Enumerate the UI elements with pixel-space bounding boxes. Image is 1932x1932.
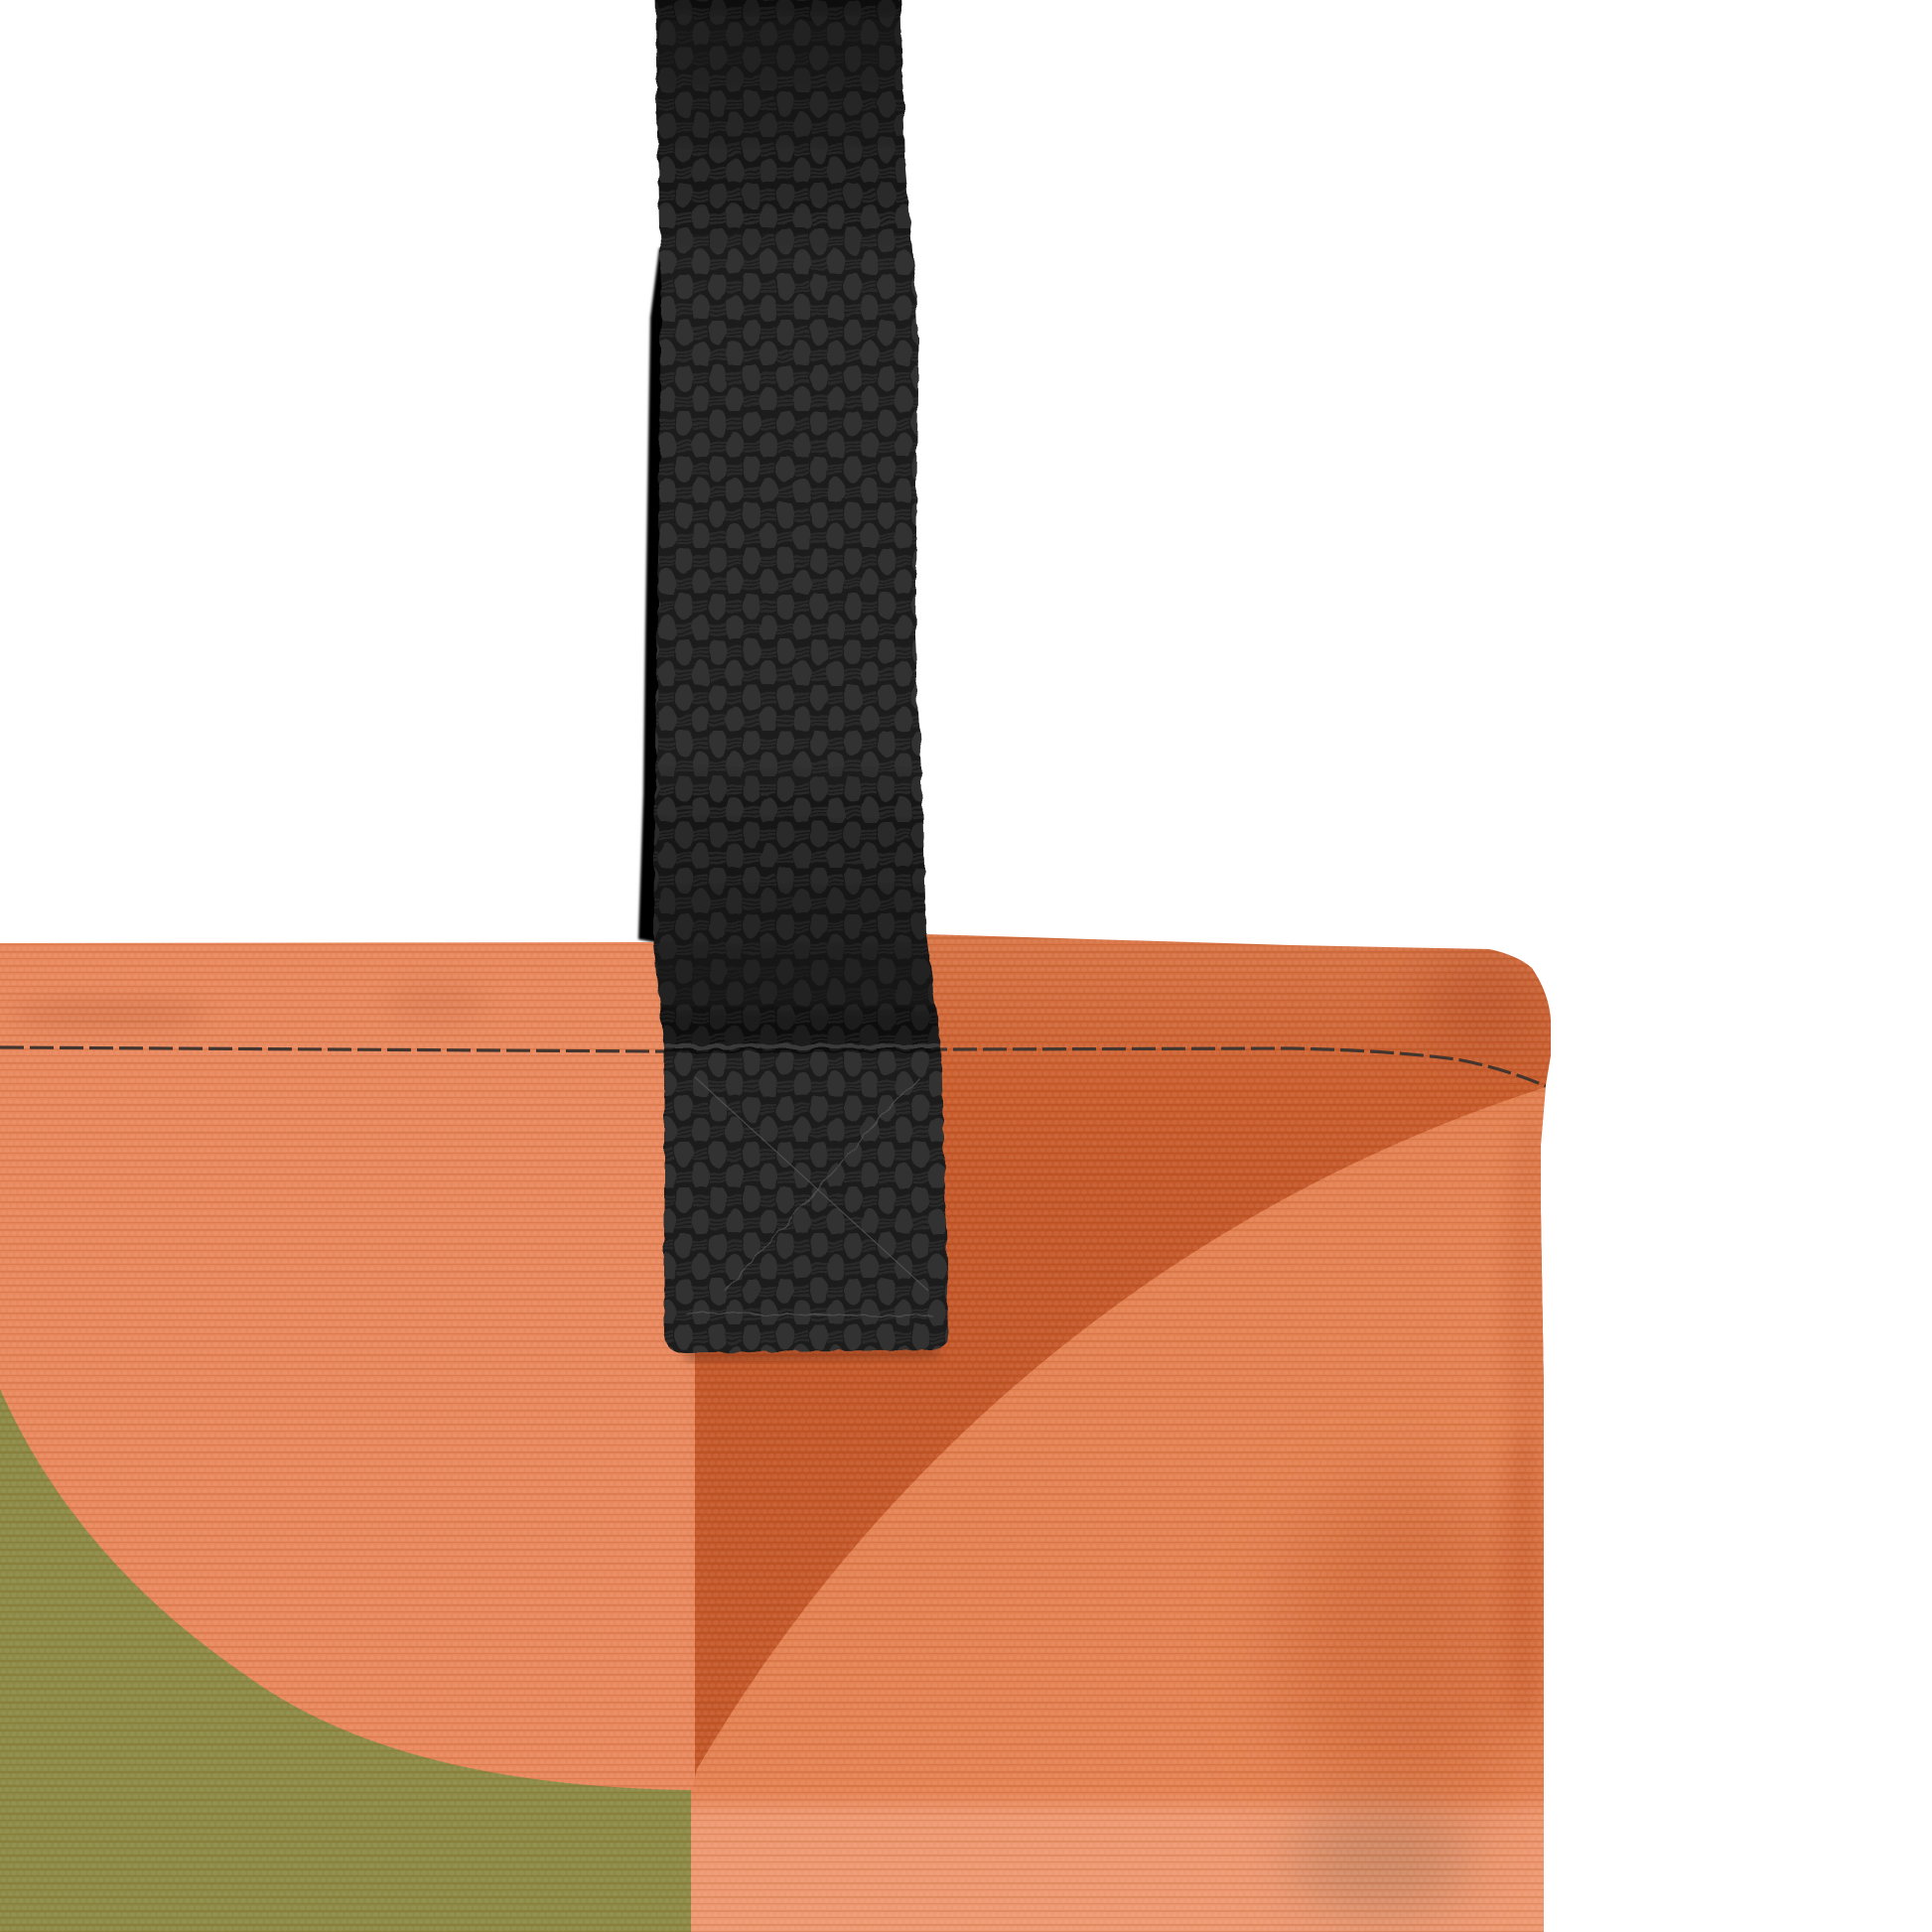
fabric shading: wrinkles near the left top edge	[35, 1001, 184, 1027]
panel: left peach field	[0, 942, 695, 1791]
tote bag body	[0, 923, 1559, 1932]
seam stitching	[0, 1047, 1546, 1086]
strap fold line	[664, 1044, 941, 1048]
strap weave	[653, 0, 949, 1354]
panel: right dark terracotta field	[695, 923, 1559, 1807]
black woven strap	[653, 0, 949, 1354]
strap cross-stitches	[685, 1077, 933, 1316]
fabric shading: wrinkles in lower right	[1281, 1479, 1539, 1817]
panel: olive semicircle	[0, 1389, 691, 1932]
panel: lower light band	[691, 1791, 1555, 1932]
fabric weave texture	[0, 923, 1559, 1932]
strap drop shadow on bag	[685, 1352, 938, 1356]
strap vertical shading	[653, 0, 941, 1054]
black strap underside sliver	[638, 248, 675, 943]
panel: light orange quarter circle	[690, 1087, 1559, 1802]
fabric shading: top right corner fold	[1426, 948, 1551, 1048]
